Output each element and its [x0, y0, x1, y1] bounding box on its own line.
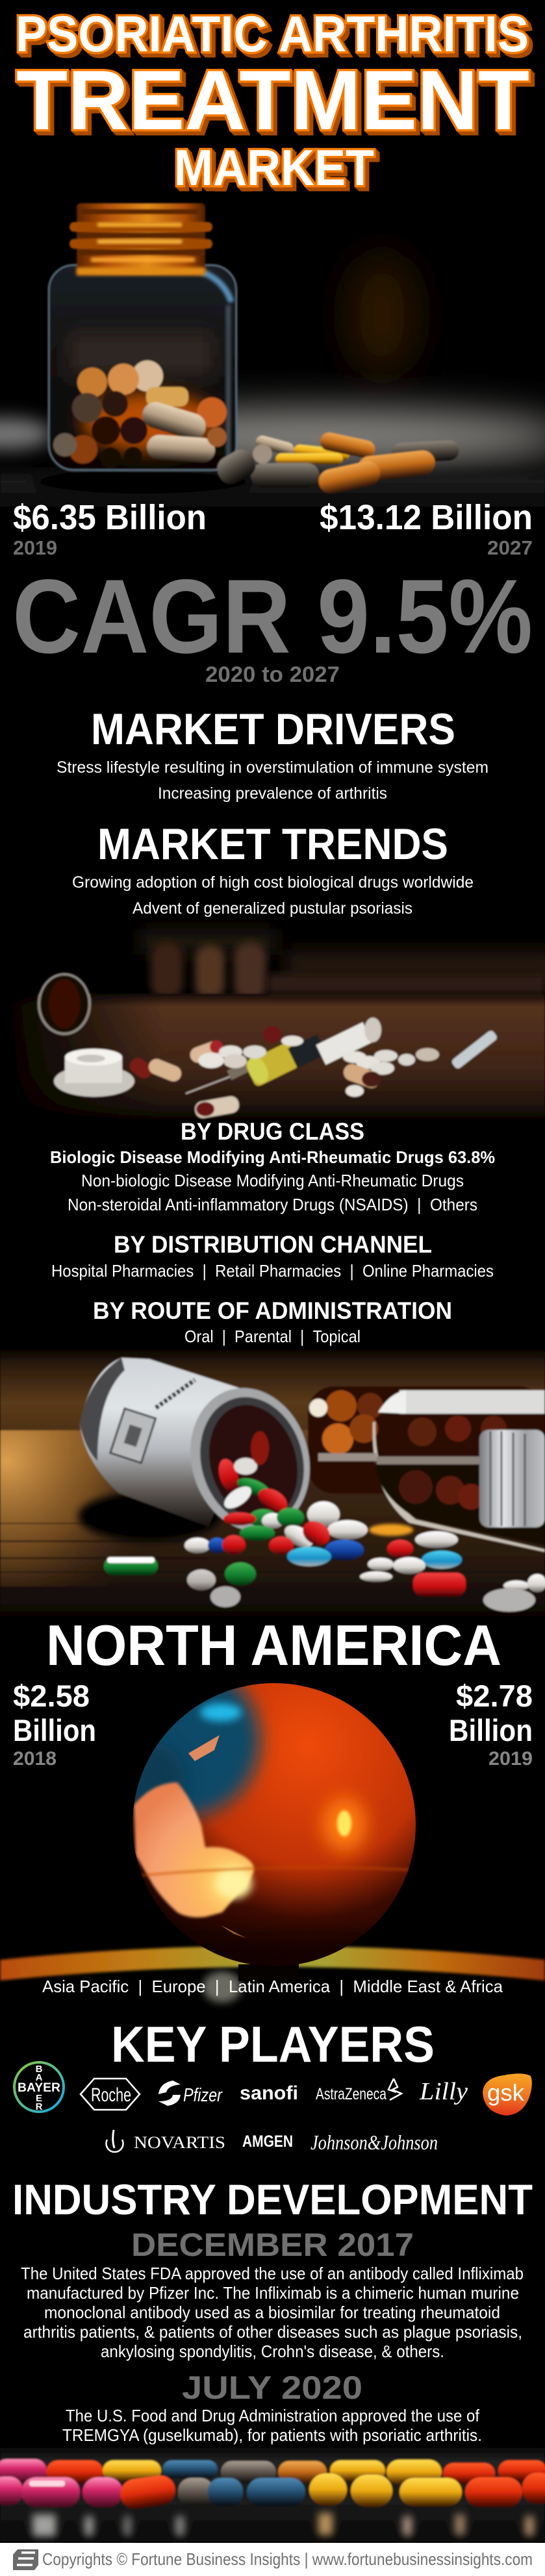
market size 2019: [13, 498, 207, 559]
north america 2019: [449, 1679, 533, 1769]
market size 2027: 2027: [487, 536, 533, 559]
logo: Roche: Roche: [91, 2084, 131, 2106]
logo: Bayer: E: [36, 2093, 42, 2104]
silver bottle neck right: [479, 1430, 545, 1527]
logo: AstraZeneca: AstraZeneca: [316, 2085, 387, 2103]
market trends: [72, 819, 474, 918]
syringe: [186, 1018, 381, 1094]
spilled pills: [104, 1501, 545, 1612]
footer: [0, 2543, 545, 2576]
logo: gsk: gsk: [487, 2079, 525, 2106]
development: December 2017: manufactured by Pfizer Inc. The Infliximab is a chimeric human murine: [27, 2283, 519, 2303]
jar neck: [70, 203, 212, 275]
market trends: Growing adoption of high cost biological drugs worldwide: [72, 873, 474, 892]
development: December 2017: [21, 2227, 524, 2361]
logo: Amgen: AMGEN: [242, 2132, 293, 2151]
north america 2018: $2.58: [13, 1679, 90, 1713]
market drivers: MARKET DRIVERS: [91, 705, 455, 754]
scattered pills: [127, 1026, 439, 1119]
market drivers: Increasing prevalence of arthritis: [158, 784, 387, 803]
title: [16, 5, 529, 196]
market size 2027: $13.12 Billion: [320, 498, 533, 537]
north america 2019: 2019: [488, 1748, 533, 1769]
logo: Novartis: [106, 2130, 225, 2152]
logo: gsk: [483, 2073, 532, 2116]
by drug class: Non-biologic Disease Modifying Anti-Rheumatic Drugs: [81, 1171, 464, 1190]
logo: Roche: [81, 2079, 140, 2110]
north america 2018: 2018: [13, 1748, 57, 1769]
key player logos: [14, 2062, 532, 2154]
logo: Pfizer: Pfizer: [183, 2085, 223, 2106]
logo: Bayer: B: [36, 2064, 43, 2075]
north america heading: NORTH AMERICA: [46, 1613, 501, 1677]
logo: Bayer: [14, 2062, 64, 2112]
market trends: MARKET TRENDS: [97, 819, 448, 869]
photo: pill jar: [0, 203, 545, 515]
logo: Lilly: Lilly: [419, 2078, 468, 2105]
by distribution channel: BY DISTRIBUTION CHANNEL: [114, 1231, 432, 1258]
market trends: Advent of generalized pustular psoriasis: [133, 899, 412, 918]
north america 2019: $2.78: [456, 1679, 533, 1713]
by drug class: BY DRUG CLASS: [181, 1118, 364, 1145]
glass vial: [451, 1029, 498, 1070]
by route of administration: Oral | Parental | Topical: [184, 1327, 361, 1346]
back row: [0, 2459, 545, 2484]
logo: Fortune Business Insights: [13, 2549, 38, 2570]
market size 2027: [320, 498, 533, 559]
logo: Bayer: BAYER: [18, 2081, 60, 2095]
by route of administration: [93, 1297, 452, 1346]
development: December 2017: monoclonal antibody used as a biosimilar for treating rheumatoid: [44, 2303, 500, 2322]
hand: [140, 929, 545, 1001]
CAGR: 2020 to 2027: [205, 662, 340, 687]
silver bottle spilled: [80, 1358, 326, 1545]
north america 2019: Billion: [449, 1713, 533, 1747]
globe: [0, 1664, 545, 2003]
logo: Pfizer: [158, 2081, 223, 2106]
by distribution channel: Hospital Pharmacies | Retail Pharmacies | Online Pharmacies: [51, 1261, 494, 1281]
by route of administration: BY ROUTE OF ADMINISTRATION: [93, 1297, 452, 1324]
pills inside jar: [53, 360, 227, 468]
north america 2018: [13, 1679, 96, 1769]
photo: row of coloured capsules: [0, 2445, 545, 2543]
market size 2019: 2019: [13, 536, 57, 559]
reflections: [32, 2513, 534, 2536]
development: December 2017: ankylosing spondylitis, Crohn's disease, & others.: [101, 2342, 444, 2361]
loose capsules: [212, 431, 460, 496]
by drug class: Biologic Disease Modifying Anti-Rheumatic Drugs 63.8%: [50, 1147, 495, 1167]
logo: Johnson & Johnson: Johnson&Johnson: [311, 2131, 438, 2154]
development: July 2020: [62, 2370, 482, 2445]
logo: Novartis: NOVARTIS: [134, 2133, 225, 2152]
title: MARKET: [174, 139, 374, 196]
regions list: Asia Pacific | Europe | Latin America | Middle East & Africa: [42, 1977, 503, 1996]
overturned bottle: [39, 974, 90, 1034]
logo: Bayer: R: [36, 2101, 43, 2112]
logo: sanofi: sanofi: [240, 2082, 298, 2104]
market drivers: Stress lifestyle resulting in overstimulation of immune system: [57, 758, 488, 777]
development: July 2020: The U.S. Food and Drug Administration approved the use of: [66, 2406, 480, 2425]
by drug class: Non-steroidal Anti-inflammatory Drugs (NSAIDS) | Others: [68, 1195, 477, 1214]
development: December 2017: arthritis patients, & patients of other diseases such as plague psoriasis,: [23, 2322, 522, 2342]
title: TREATMENT: [16, 53, 529, 147]
market drivers: [57, 705, 488, 803]
development: December 2017: DECEMBER 2017: [131, 2227, 414, 2263]
logo: AstraZeneca: [316, 2079, 401, 2103]
photo: spilled pill bottles: [0, 1347, 545, 1623]
white cap: [54, 1049, 134, 1097]
front row: [0, 2473, 545, 2511]
horizon glow: [0, 1945, 545, 1981]
by distribution channel: [51, 1231, 494, 1281]
development: July 2020: JULY 2020: [182, 2370, 362, 2406]
by drug class: [50, 1118, 495, 1214]
key players heading: KEY PLAYERS: [111, 2016, 435, 2073]
amber bottle right: [308, 1386, 545, 1552]
photo: syringe and pills on table: [0, 929, 545, 1123]
market size 2019: $6.35 Billion: [13, 498, 207, 537]
north america 2018: Billion: [13, 1713, 96, 1747]
development: July 2020: TREMGYA (guselkumab), for patients with psoriatic arthritis.: [62, 2425, 482, 2445]
logo: Bayer: A: [36, 2072, 43, 2083]
jar body: [49, 265, 236, 470]
